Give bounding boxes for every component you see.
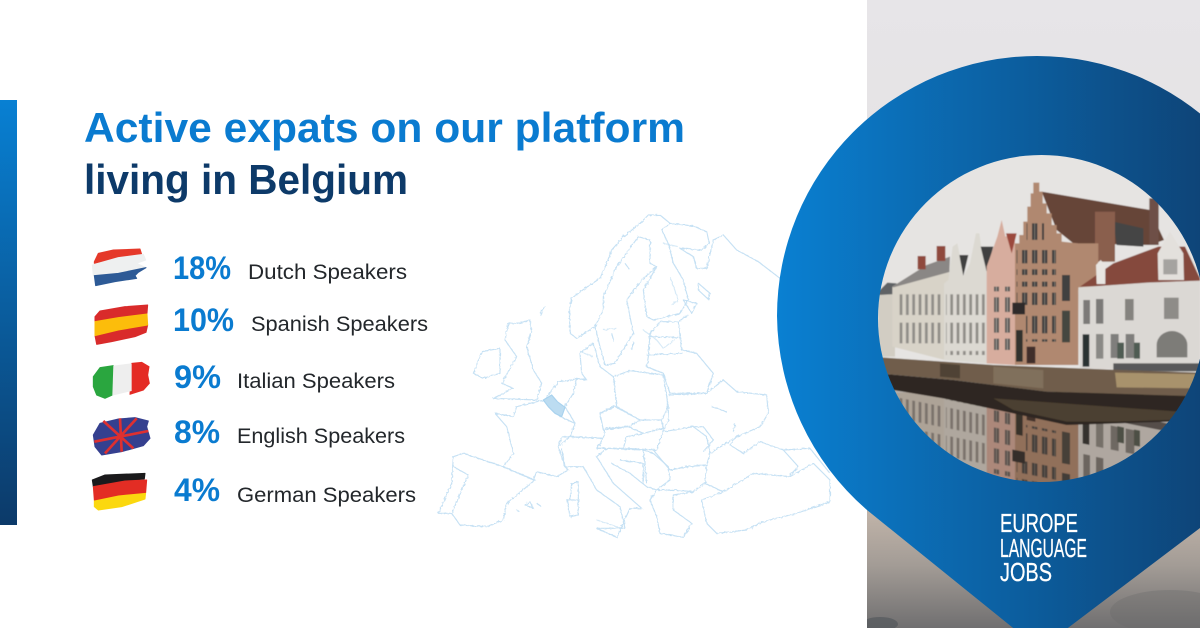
title: living in Belgium xyxy=(84,156,408,203)
europe map xyxy=(438,215,830,537)
logo xyxy=(1000,508,1087,587)
row 2 label: Spanish Speakers xyxy=(251,312,428,336)
flag: United Kingdom xyxy=(93,418,150,455)
belgium highlight xyxy=(543,395,565,417)
logo: LANGUAGE xyxy=(1000,533,1087,563)
stat rows xyxy=(92,249,428,510)
logo: JOBS xyxy=(1000,557,1052,587)
flag: Italy xyxy=(93,362,149,398)
reflected buildings xyxy=(896,392,1168,482)
background photo panel xyxy=(862,0,1200,628)
photo of Bruges canal in pin xyxy=(878,155,1200,482)
logo: EUROPE xyxy=(1000,508,1078,538)
row 5 label: German Speakers xyxy=(237,483,416,507)
flag: Spain xyxy=(95,305,148,344)
canal wall xyxy=(880,357,1200,397)
row 5 value: 4% xyxy=(174,472,220,508)
row 4 value: 8% xyxy=(174,414,220,450)
row 4 label: English Speakers xyxy=(237,424,405,448)
flag: Germany xyxy=(92,473,147,510)
row 1 value: 18% xyxy=(173,250,231,286)
title: Active expats on our platform xyxy=(84,104,685,151)
row 3 label: Italian Speakers xyxy=(237,369,395,393)
flag: Netherlands xyxy=(92,249,146,286)
location pin xyxy=(777,56,1200,628)
row 3 value: 9% xyxy=(174,359,221,395)
dark water reflection of wall xyxy=(886,374,1188,425)
row 1 label: Dutch Speakers xyxy=(248,260,407,284)
row 2 value: 10% xyxy=(173,302,234,338)
title xyxy=(84,104,685,203)
left accent bar xyxy=(0,100,17,525)
